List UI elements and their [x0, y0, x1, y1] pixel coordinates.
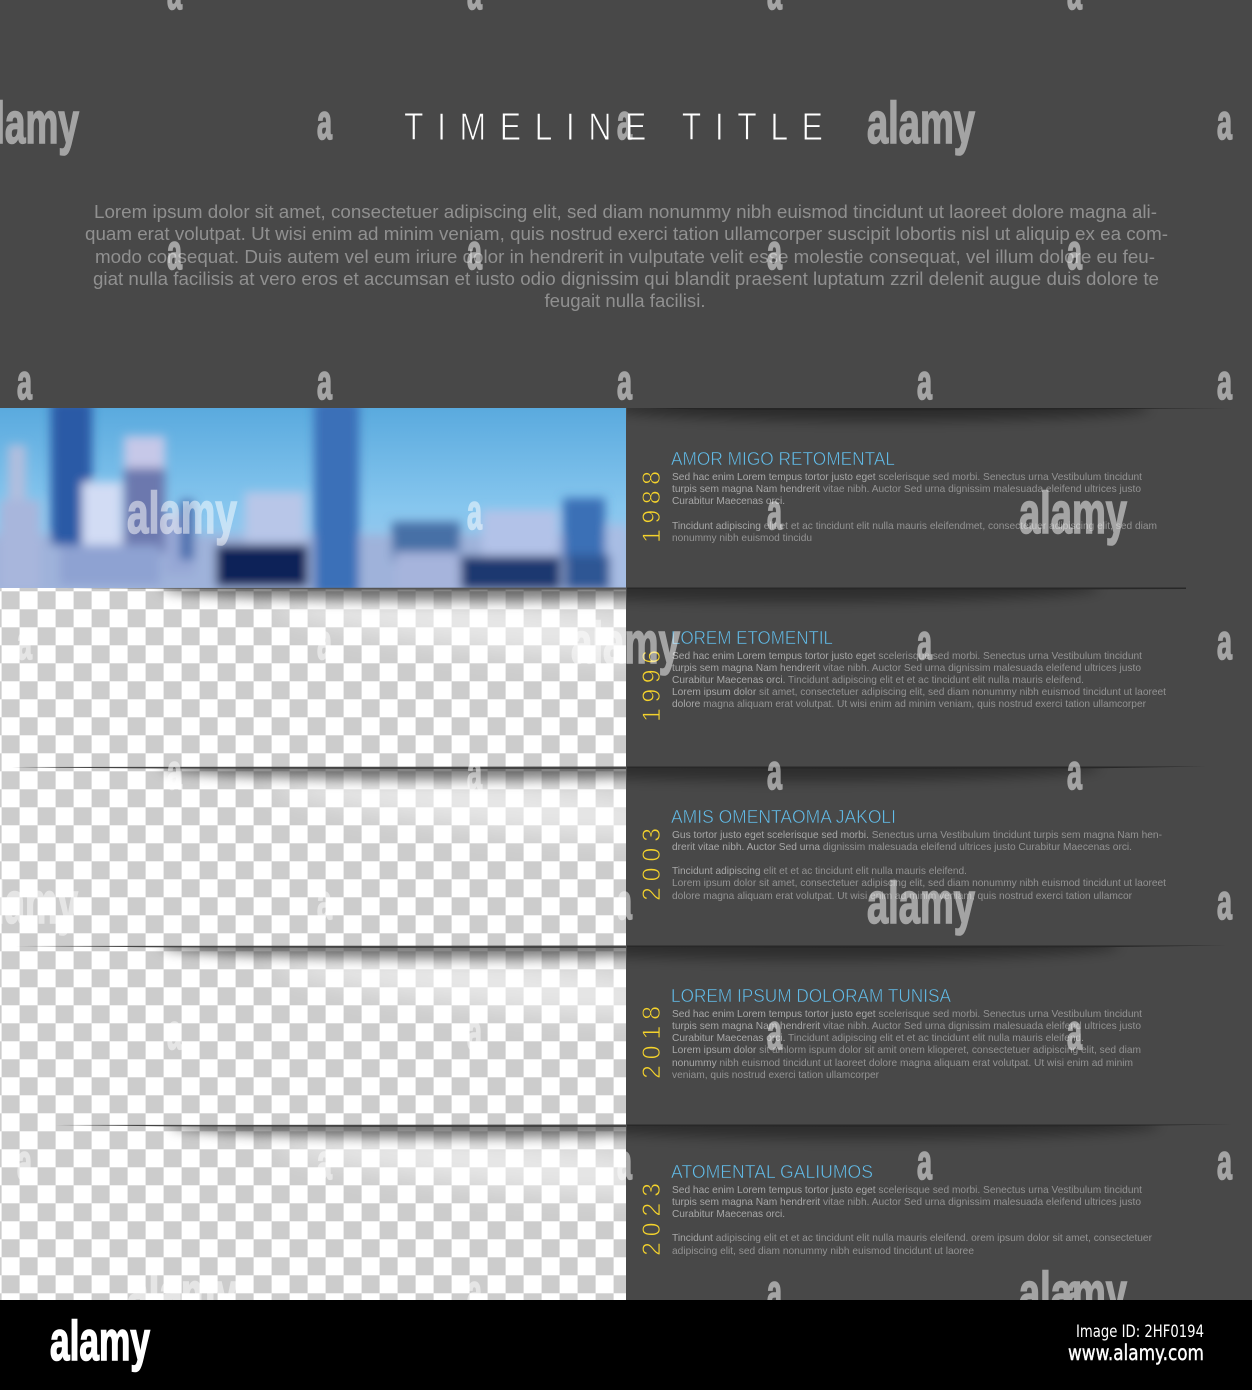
image id: Image ID: 2HF0194: [1076, 1322, 1204, 1342]
panel: 1996 entry: [638, 627, 1166, 722]
year 2003: 2003: [638, 828, 666, 901]
intro paragraph: giat nulla facilisis at vero eros et accumsan et iusto odio dignissim qui blandit praesent luptatum zzril delenit augue duis dolore te: [93, 269, 1159, 289]
panel: 2023 entry: [638, 1161, 1153, 1257]
body 1996: Curabitur Maecenas orci. Tincidunt adipiscing elit et et ac tincidunt elit nulla mauris eleifend.: [672, 675, 1084, 686]
watermarks: a: [17, 614, 33, 670]
body 2018: Sed hac enim Lorem tempus tortor justo eget scelerisque sed morbi. Senectus urna Vestibulum tincidunt: [672, 1009, 1142, 1020]
watermarks: a: [767, 1004, 783, 1060]
watermarks: a: [917, 614, 933, 670]
watermarks: a: [317, 1134, 333, 1190]
body 1988: Tincidunt adipiscing elit et et ac tincidunt elit nulla mauris eleifendmet, consectetuer adipiscing elit, sed diam: [672, 521, 1157, 532]
watermarks: alamy: [1019, 1261, 1127, 1326]
body 2018: veniam, quis nostrud exerci tation ullamcorper: [672, 1070, 880, 1081]
watermarks: alamy: [127, 1261, 237, 1326]
watermarks: a: [917, 1134, 933, 1190]
heading 2023: ATOMENTAL GALIUMOS: [671, 1161, 873, 1182]
panel: cityscape photo: [0, 400, 630, 595]
body 2023: Sed hac enim Lorem tempus tortor justo eget scelerisque sed morbi. Senectus urna Vestibulum tincidunt: [672, 1185, 1142, 1196]
shadow under row 2: [70, 588, 1186, 666]
watermarks: a: [1217, 874, 1233, 930]
heading 2003: AMIS OMENTAOMA JAKOLI: [671, 806, 896, 827]
watermarks: alamy: [867, 91, 975, 156]
watermarks: a: [1067, 224, 1083, 280]
panel: 2003 entry: [638, 806, 1166, 902]
body 2003: Tincidunt adipiscing elit et et ac tincidunt elit nulla mauris eleifend.: [672, 866, 967, 877]
body 2003: drerit vitae nibh. Auctor Sed urna dignissim malesuada eleifend ultrices justo Curabitur Maecenas orci.: [672, 842, 1132, 853]
watermarks: a: [1217, 614, 1233, 670]
watermarks: alamy: [571, 611, 680, 676]
shadow under row 1 (photo and text): [627, 408, 1219, 424]
watermarks: a: [167, 1004, 183, 1060]
watermarks: a: [317, 354, 333, 410]
heading 1996: LOREM ETOMENTIL: [671, 627, 833, 648]
watermarks: a: [467, 1264, 483, 1320]
body 1996: Lorem ipsum dolor sit amet, consectetuer adipiscing elit, sed diam nonummy nibh euismod tincidunt ut laoreet: [672, 687, 1166, 698]
watermarks: a: [1067, 1264, 1083, 1320]
watermarks: a: [617, 354, 633, 410]
panel: 1988 entry: [638, 448, 1157, 544]
year 1988: 1988: [638, 471, 666, 543]
body 2023: Tincidunt adipiscing elit et et ac tincidunt elit nulla mauris eleifend. orem ipsum dolor sit amet, consectetuer: [672, 1233, 1153, 1244]
year 2023: 2023: [638, 1183, 666, 1256]
intro paragraph: quam erat volutpat. Ut wisi enim ad minim veniam, quis nostrud exerci tation ullamcorper suscipit lobortis nisl ut aliquip ex ea com-: [85, 224, 1168, 244]
watermarks: a: [17, 1134, 33, 1190]
watermarks: a: [767, 744, 783, 800]
body 2003: Gus tortor justo eget scelerisque sed morbi. Senectus urna Vestibulum tincidunt turpis sem magna Nam hen-: [672, 830, 1162, 841]
shadow under row 4: [18, 946, 1216, 1024]
footer logo: alamy: [50, 1309, 150, 1372]
watermarks: a: [767, 224, 783, 280]
watermarks: a: [617, 874, 633, 930]
watermarks: a: [1067, 1004, 1083, 1060]
body 1988: nonummy nibh euismod tincidu: [672, 533, 812, 544]
shadow under row 5: [58, 1124, 1222, 1203]
watermarks: a: [467, 744, 483, 800]
intro paragraph: feugait nulla facilisi.: [544, 291, 706, 311]
year 2018: 2018: [638, 1006, 666, 1079]
body 2003: dolore magna aliquam erat volutpat. Ut wisi enim ad minim veniam, quis nostrud exerci tation ullamcor: [672, 891, 1133, 902]
body 1988: [672, 472, 1157, 544]
watermarks: alamy: [1019, 481, 1127, 546]
body 2023: [672, 1185, 1153, 1257]
body 1988: Curabitur Maecenas orci.: [672, 496, 785, 507]
watermarks: a: [1217, 94, 1233, 150]
footer bar: [0, 1300, 1252, 1390]
watermarks: a: [317, 614, 333, 670]
watermarks: a: [17, 354, 33, 410]
body 2023: turpis sem magna Nam hendrerit vitae nibh. Auctor Sed urna dignissim malesuada eleifend ultrices justo: [672, 1197, 1141, 1208]
watermarks: a: [467, 1004, 483, 1060]
body 2018: Lorem ipsum dolor sit amlorm ispum dolor sit amit onem klioperet, consectetuer adipiscing elit, sed diam: [672, 1045, 1141, 1056]
body 1988: Sed hac enim Lorem tempus tortor justo eget scelerisque sed morbi. Senectus urna Vestibulum tincidunt: [672, 472, 1142, 483]
watermarks: a: [317, 94, 333, 150]
watermarks: a: [1067, 744, 1083, 800]
body 2003: Lorem ipsum dolor sit amet, consectetuer adipiscing elit, sed diam nonummy nibh euismod tincidunt ut laoreet: [672, 878, 1166, 889]
intro paragraph: Lorem ipsum dolor sit amet, consectetuer adipiscing elit, sed diam nonummy nibh euismod tincidunt ut laoreet dolore magna ali-: [94, 202, 1157, 222]
watermarks: a: [767, 1264, 783, 1320]
heading 1988: AMOR MIGO RETOMENTAL: [671, 448, 895, 469]
watermarks: a: [167, 224, 183, 280]
shadow under row 3: [14, 766, 1198, 846]
watermarks: alamy: [127, 481, 237, 546]
body 1996: dolore magna aliquam erat volutpat. Ut wisi enim ad minim veniam, quis nostrud exerci tation ullamcorper: [672, 699, 1147, 710]
watermarks: a: [167, 744, 183, 800]
body 2003: [672, 830, 1166, 902]
watermarks: a: [617, 94, 633, 150]
year 1996: 1996: [638, 650, 666, 722]
body 1988: turpis sem magna Nam hendrerit vitae nibh. Auctor Sed urna dignissim malesuada eleifend ultrices justo: [672, 484, 1141, 495]
body 1996: [672, 651, 1166, 710]
intro paragraph: modo consequat. Duis autem vel eum iriure dolor in hendrerit in vulputate velit esse molestie consequat, vel illum dolore eu feu-: [95, 247, 1155, 267]
watermarks: a: [467, 224, 483, 280]
body 1996: Sed hac enim Lorem tempus tortor justo eget scelerisque sed morbi. Senectus urna Vestibulum tincidunt: [672, 651, 1142, 662]
title: TIMELINE TITLE: [404, 105, 823, 149]
body 2018: turpis sem magna Nam hendrerit vitae nibh. Auctor Sed urna dignissim malesuada eleifend ultrices justo: [672, 1021, 1141, 1032]
watermarks: a: [167, 1264, 183, 1320]
body 2023: adipiscing elit, sed diam nonummy nibh euismod tincidunt ut laoree: [672, 1246, 974, 1257]
watermarks: a: [317, 874, 333, 930]
body 1996: turpis sem magna Nam hendrerit vitae nibh. Auctor Sed urna dignissim malesuada eleifend ultrices justo: [672, 663, 1141, 674]
watermarks: a: [917, 354, 933, 410]
watermarks: alamy: [867, 871, 975, 936]
website: www.alamy.com: [1068, 1341, 1204, 1365]
body 2018: [672, 1009, 1142, 1081]
watermarks: a: [1217, 354, 1233, 410]
image placeholder: transparent checkerboard: [0, 588, 626, 1300]
watermarks: a: [767, 484, 783, 540]
body 2018: nonummy nibh euismod tincidunt ut laoreet dolore magna aliquam erat volutpat. Ut wisi enim ad minim: [672, 1058, 1133, 1069]
panel: 2018 entry: [638, 985, 1142, 1081]
watermarks: a: [1217, 1134, 1233, 1190]
body 2018: Curabitur Maecenas orci. Tincidunt adipiscing elit et et ac tincidunt elit nulla mauris eleifend.: [672, 1033, 1084, 1044]
watermarks: a: [467, 484, 483, 540]
watermarks: a: [617, 1134, 633, 1190]
body 2023: Curabitur Maecenas orci.: [672, 1209, 785, 1220]
heading 2018: LOREM IPSUM DOLORAM TUNISA: [671, 985, 952, 1006]
intro paragraph: [85, 202, 1168, 311]
